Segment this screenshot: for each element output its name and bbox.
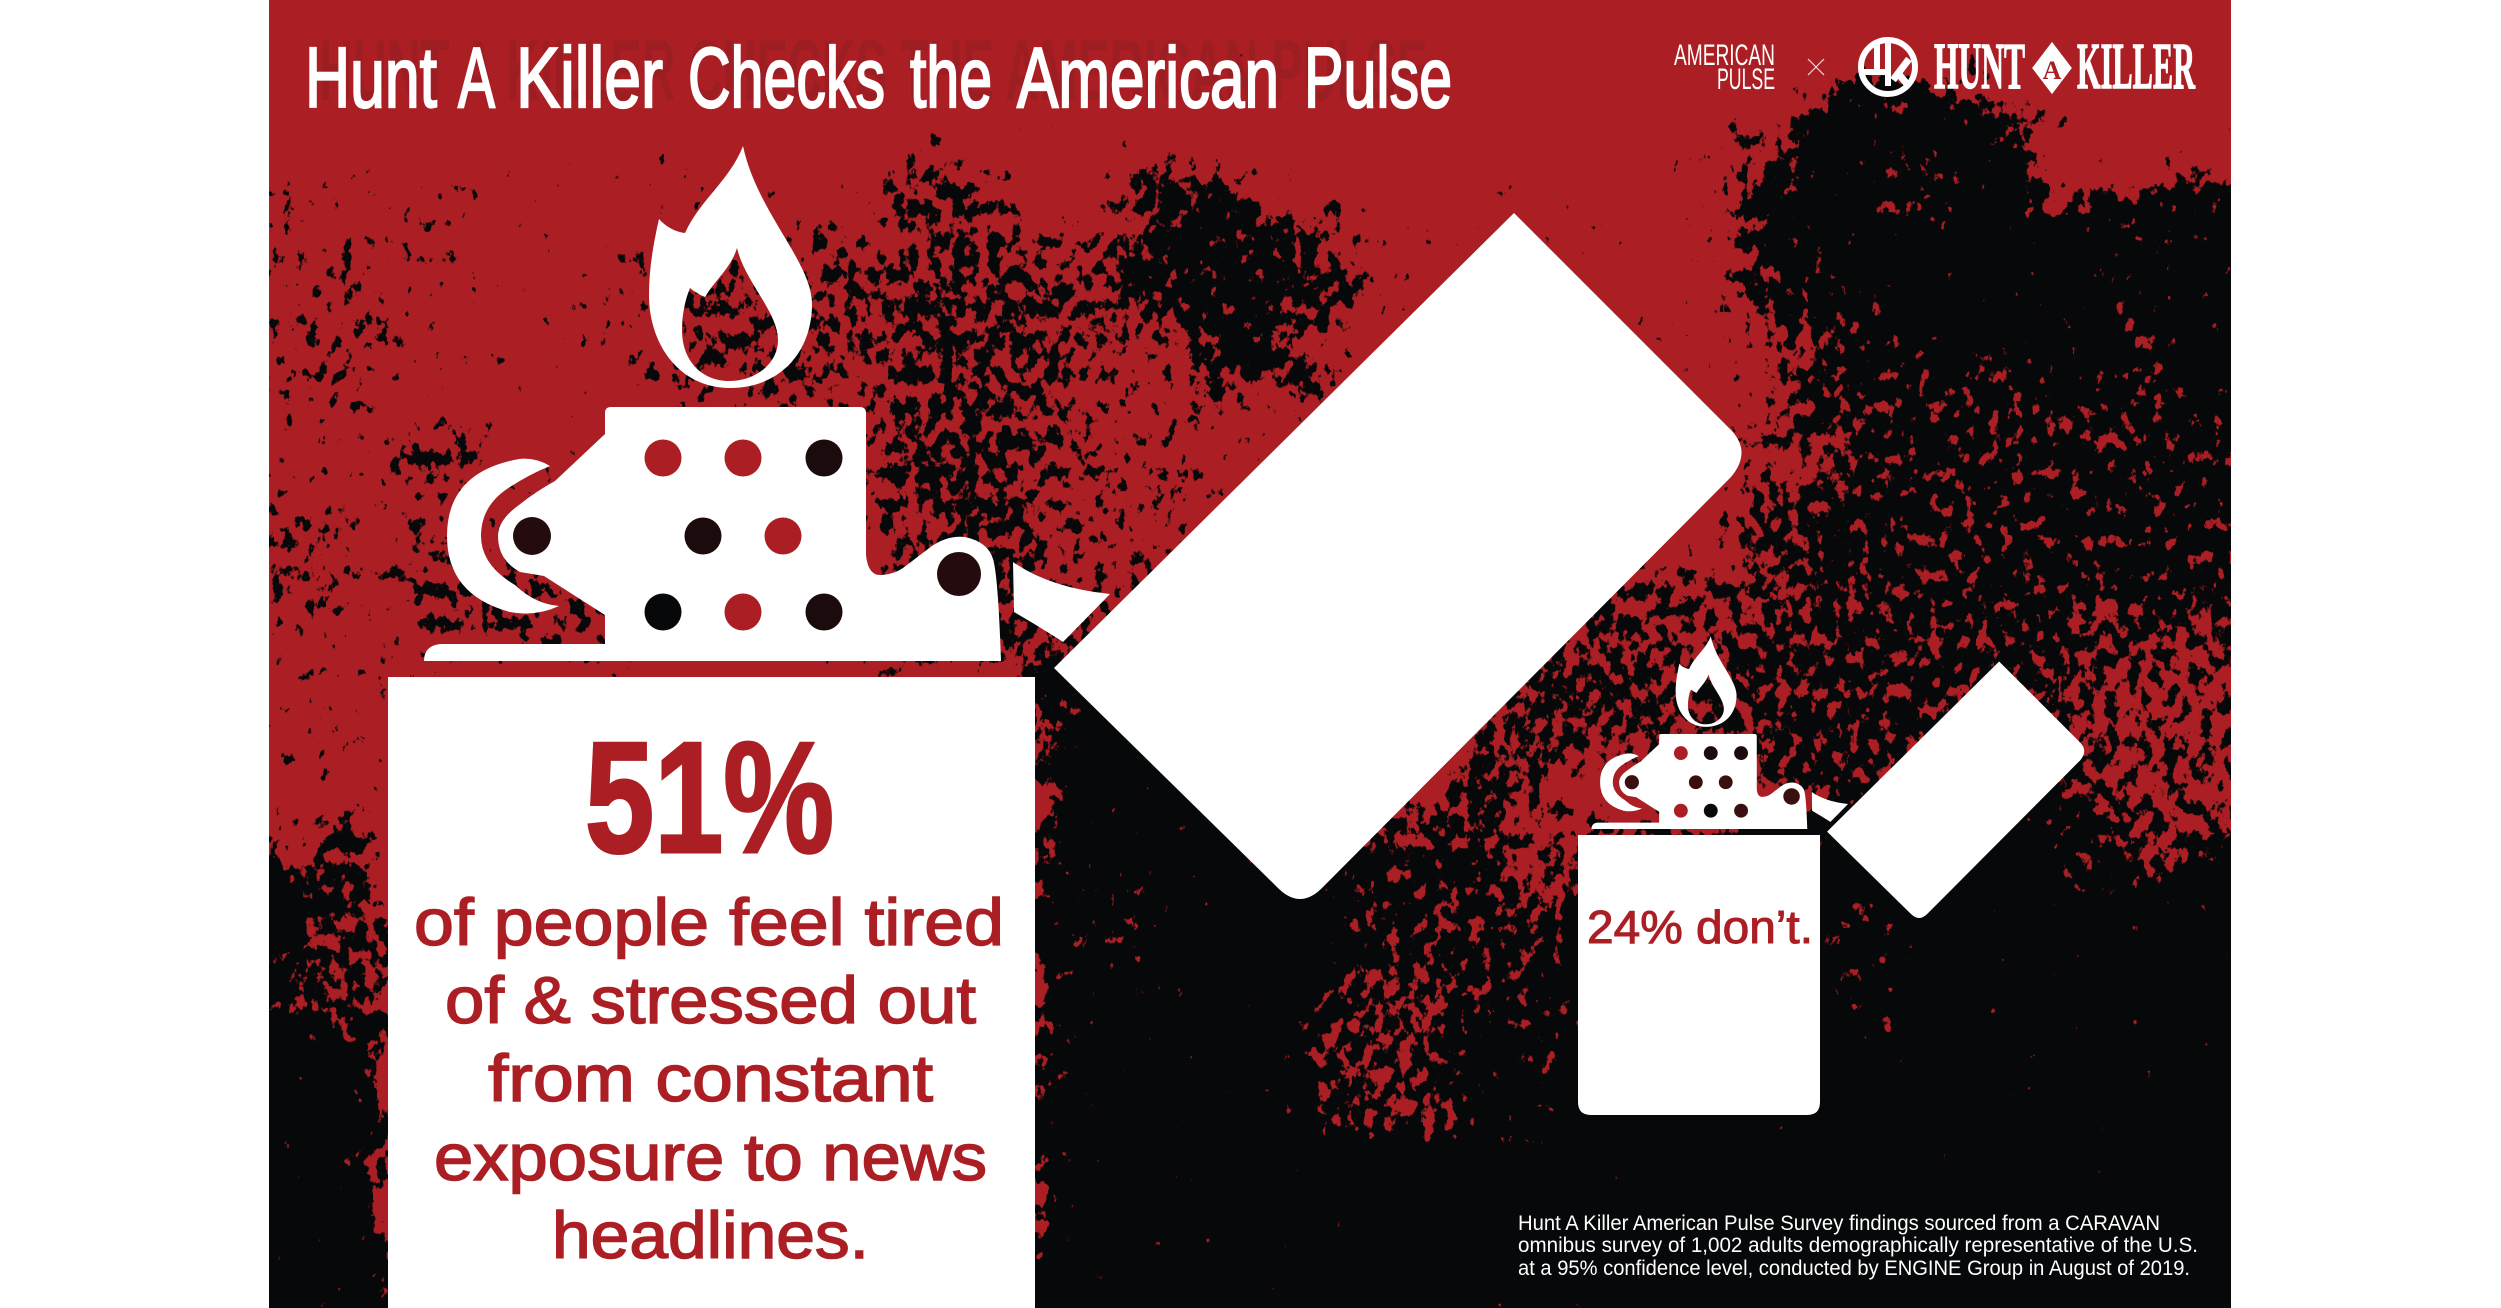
footnote: Hunt A Killer American Pulse Survey findings sourced from a CARAVAN (1518, 1212, 2160, 1235)
title (305, 31, 1452, 126)
big lighter (388, 146, 1742, 1308)
logo: Hunt A Killer: A (2043, 56, 2062, 85)
small wheel (1600, 753, 1642, 811)
small flame (1676, 636, 1737, 727)
stat description (414, 885, 1004, 1272)
under lid right (1550, 560, 1740, 700)
icon: HK monogram (1861, 40, 1915, 94)
small lighter (1578, 636, 2084, 1115)
ghost heading: HUNT A KILLER CHECKS THE AMERICAN PULSE (319, 23, 1428, 119)
title: Killer (516, 31, 663, 126)
small stat: 24% don’t. (1587, 901, 1813, 953)
left lower strip (269, 660, 388, 840)
wordmark: HUNT (1934, 30, 2025, 103)
title: Checks (688, 31, 885, 126)
stat description: headlines. (552, 1198, 869, 1272)
centre lower (1035, 670, 1375, 1308)
logo: American Pulse (1674, 39, 1775, 96)
stat description: from constant (488, 1041, 933, 1115)
icon: times separator (1808, 59, 1824, 75)
chimney holes (513, 440, 981, 630)
title: A (458, 31, 495, 126)
striker (1013, 562, 1110, 642)
footnote: at a 95% confidence level, conducted by ENGINE Group in August of 2019. (1518, 1257, 2190, 1280)
chimney (424, 407, 1001, 661)
wheel (447, 459, 559, 614)
panel: grunge background (260, 0, 2231, 1308)
right mass (1740, 110, 1810, 320)
density map: light overall scatter (269, 150, 1749, 710)
title: Pulse (1304, 31, 1452, 126)
footnote: omnibus survey of 1,002 adults demographically representative of the U.S. (1518, 1234, 2198, 1257)
flame (649, 146, 812, 388)
stat description: of & stressed out (445, 963, 976, 1037)
small chimney (1591, 734, 1807, 829)
title: Hunt (305, 31, 437, 126)
small holes (1625, 746, 1800, 818)
small lighter body (1578, 835, 1820, 1115)
lid (1054, 213, 1742, 899)
small striker (1812, 792, 1848, 822)
stat description: of people feel tired (414, 885, 1004, 959)
lighter body (388, 677, 1035, 1308)
headline stat: 51% (585, 710, 834, 886)
top-centre heavy (880, 150, 980, 230)
footnote (1518, 1212, 2198, 1280)
logo: American Pulse: AMERICAN (1674, 39, 1775, 72)
title: American (1017, 31, 1279, 126)
title: the (910, 31, 992, 126)
logo: American Pulse: PULSE (1717, 63, 1775, 96)
text: KILLER (2077, 30, 2196, 103)
left patches (314, 235, 386, 425)
small lid (1827, 661, 2084, 918)
logo: Hunt A Killer (1861, 30, 2196, 103)
stat description: exposure to news (434, 1120, 987, 1194)
